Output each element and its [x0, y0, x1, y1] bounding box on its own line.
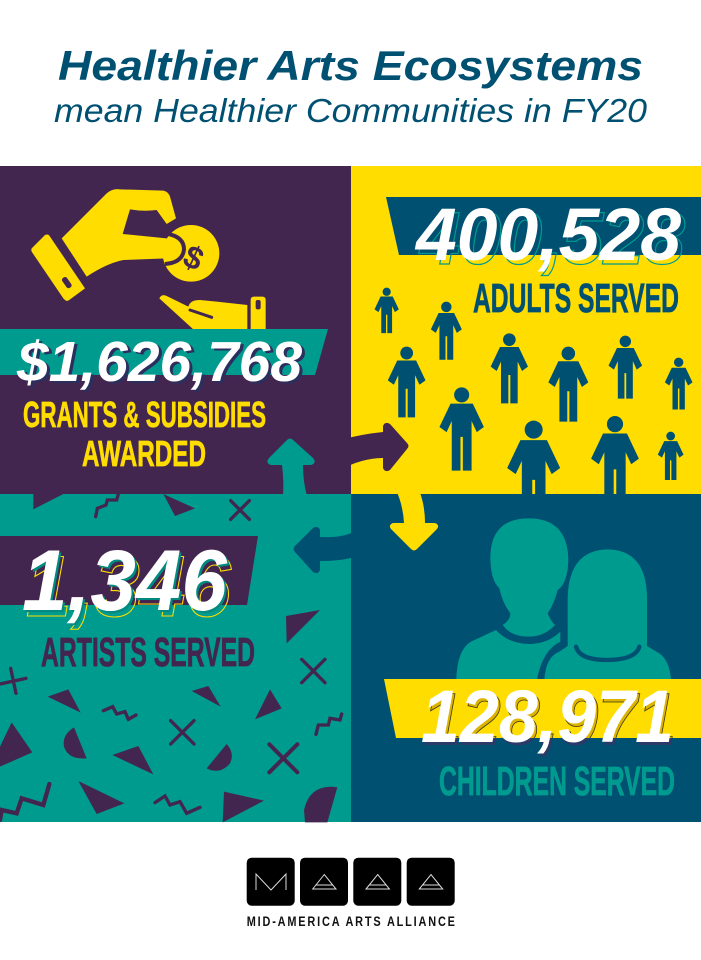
artists figure: 1,346 [22, 533, 228, 629]
title line 1: Healthier Arts Ecosystems [58, 42, 643, 89]
artists banner [0, 536, 258, 605]
arrow: to grants [267, 438, 315, 496]
panel: children [351, 494, 701, 822]
adults figure: 400,528 [414, 193, 682, 276]
panel: artists [0, 494, 351, 822]
logo wordmark: MID-AMERICA ARTS ALLIANCE [247, 914, 455, 929]
grants label [23, 394, 266, 474]
adults banner [386, 197, 701, 255]
arrow: to adults [340, 423, 408, 471]
grants label: GRANTS & SUBSIDIES [23, 394, 266, 435]
amount figure: $1,626,768 [16, 330, 302, 394]
children figure: 128,971 [423, 678, 676, 761]
people icons [375, 288, 692, 520]
children figure: 128,971 [421, 675, 674, 758]
amount banner [0, 329, 328, 375]
confetti pattern [0, 494, 342, 822]
adults figure: 400,528 [418, 197, 686, 280]
logo [247, 858, 455, 929]
panel: grants [0, 166, 351, 494]
logo marks [247, 858, 455, 906]
children banner [384, 679, 701, 738]
title [54, 42, 648, 129]
grants label: AWARDED [82, 433, 206, 474]
icon: hands and coin [31, 189, 266, 330]
panel: adults [351, 166, 701, 520]
artists figure: 1,346 [26, 539, 232, 635]
artists figure: 1,346 [24, 535, 230, 631]
icon: hands and coin: $ [178, 238, 209, 278]
arrow: to children [390, 490, 438, 550]
title line 2: mean Healthier Communities in FY20 [54, 92, 648, 129]
artists label: ARTISTS SERVED [41, 629, 255, 675]
icon: two children [456, 518, 671, 679]
logo letters [256, 874, 443, 890]
arrow: to artists [294, 527, 351, 573]
amount figure: $1,626,768 [19, 332, 305, 396]
children figure: 128,971 [423, 678, 676, 761]
